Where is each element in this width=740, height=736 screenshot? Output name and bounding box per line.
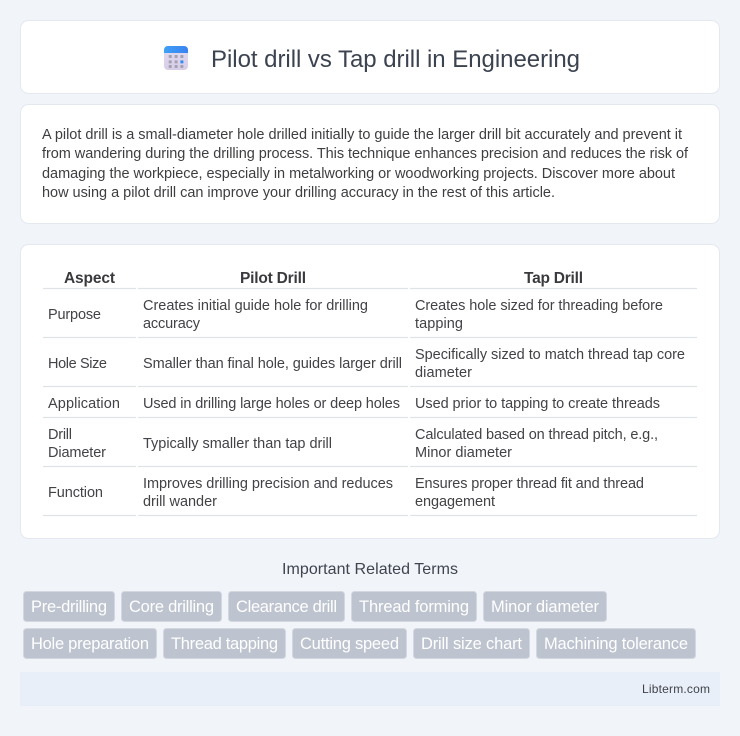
table row: Drill Diameter: Diameter — [48, 445, 106, 461]
table row: Function: Improves drilling precision and reduces — [143, 476, 393, 492]
tag: Machining tolerance: Machining tolerance — [544, 635, 688, 653]
footer — [20, 672, 720, 706]
icon: calendar — [164, 46, 188, 70]
tag: Minor diameter: Minor diameter — [491, 598, 600, 616]
table row: Function: Ensures proper thread fit and thread — [415, 476, 644, 492]
tag: Thread forming — [352, 592, 476, 622]
table row: Application: Used in drilling large holes or deep holes — [143, 396, 400, 412]
tag: Thread tapping — [164, 628, 286, 658]
footer credit: Libterm.com — [642, 682, 710, 696]
table row: Purpose — [48, 298, 663, 332]
panel: introduction text — [20, 104, 720, 224]
intro paragraph: from wandering during the drilling process. This technique enhances precision and reduces the risk of — [42, 146, 689, 162]
table row: Purpose: Purpose — [48, 307, 101, 323]
tag: Hole preparation — [24, 628, 156, 658]
table row: Function: Function — [48, 485, 103, 501]
table header row — [64, 270, 583, 287]
intro paragraph: damaging the workpiece, especially in metalworking or woodworking projects. Discover more about — [42, 166, 675, 182]
tags: related terms — [24, 592, 696, 658]
table row: Hole Size — [48, 347, 685, 381]
table row: Application — [48, 396, 660, 412]
table row: Drill Diameter: Minor diameter — [415, 445, 512, 461]
table row: Drill Diameter: Typically smaller than tap drill — [143, 436, 332, 452]
table header row: Pilot Drill — [240, 270, 306, 287]
table row: Drill Diameter: Calculated based on thread pitch, e.g., — [415, 427, 658, 443]
table row: Purpose: tapping — [415, 316, 463, 332]
tag: Drill size chart: Drill size chart — [421, 635, 522, 653]
table row: Function — [48, 476, 644, 510]
tag: Thread forming: Thread forming — [359, 598, 469, 616]
table row: Hole Size: diameter — [415, 365, 472, 381]
tag: Cutting speed — [292, 628, 406, 658]
tag: Hole preparation: Hole preparation — [31, 635, 149, 653]
heading: related terms: Important Related Terms — [282, 561, 458, 578]
panel: header — [20, 20, 720, 94]
table row: Function: drill wander — [143, 494, 217, 510]
tag: Clearance drill — [228, 592, 344, 622]
tag: Clearance drill: Clearance drill — [236, 598, 337, 616]
table header row: Aspect — [64, 270, 115, 287]
table row: Drill Diameter: Drill — [48, 427, 72, 443]
table row: Purpose: accuracy — [143, 316, 201, 332]
tag: Minor diameter — [484, 592, 606, 622]
title: Pilot drill vs Tap drill in Engineering — [211, 46, 580, 73]
table row: Hole Size: Specifically sized to match thread tap core — [415, 347, 685, 363]
tag: Pre-drilling: Pre-drilling — [31, 598, 107, 616]
table row: Purpose: Creates hole sized for threading before — [415, 298, 663, 314]
table row: Hole Size: Hole Size — [48, 356, 107, 372]
intro paragraph — [42, 127, 689, 201]
tag: Core drilling: Core drilling — [129, 598, 214, 616]
tag: Thread tapping: Thread tapping — [171, 635, 278, 653]
table row: Application: Application — [48, 396, 120, 412]
tag: Drill size chart — [414, 628, 530, 658]
tag: Core drilling — [122, 592, 222, 622]
tag: Machining tolerance — [536, 628, 696, 658]
table row: Purpose: Creates initial guide hole for drilling — [143, 298, 368, 314]
tag: Pre-drilling — [24, 592, 114, 622]
intro paragraph: A pilot drill is a small-diameter hole drilled initially to guide the larger drill bit accurately and prevent it — [42, 127, 682, 143]
panel: comparison table — [20, 244, 720, 538]
table header row: Tap Drill — [524, 270, 583, 287]
tag: Cutting speed: Cutting speed — [300, 635, 399, 653]
table row: Drill Diameter — [48, 427, 658, 461]
table row: Application: Used prior to tapping to create threads — [415, 396, 660, 412]
table row: Hole Size: Smaller than final hole, guides larger drill — [143, 356, 402, 372]
table row: Function: engagement — [415, 494, 495, 510]
intro paragraph: how using a pilot drill can improve your drilling accuracy in the rest of this article. — [42, 185, 555, 201]
